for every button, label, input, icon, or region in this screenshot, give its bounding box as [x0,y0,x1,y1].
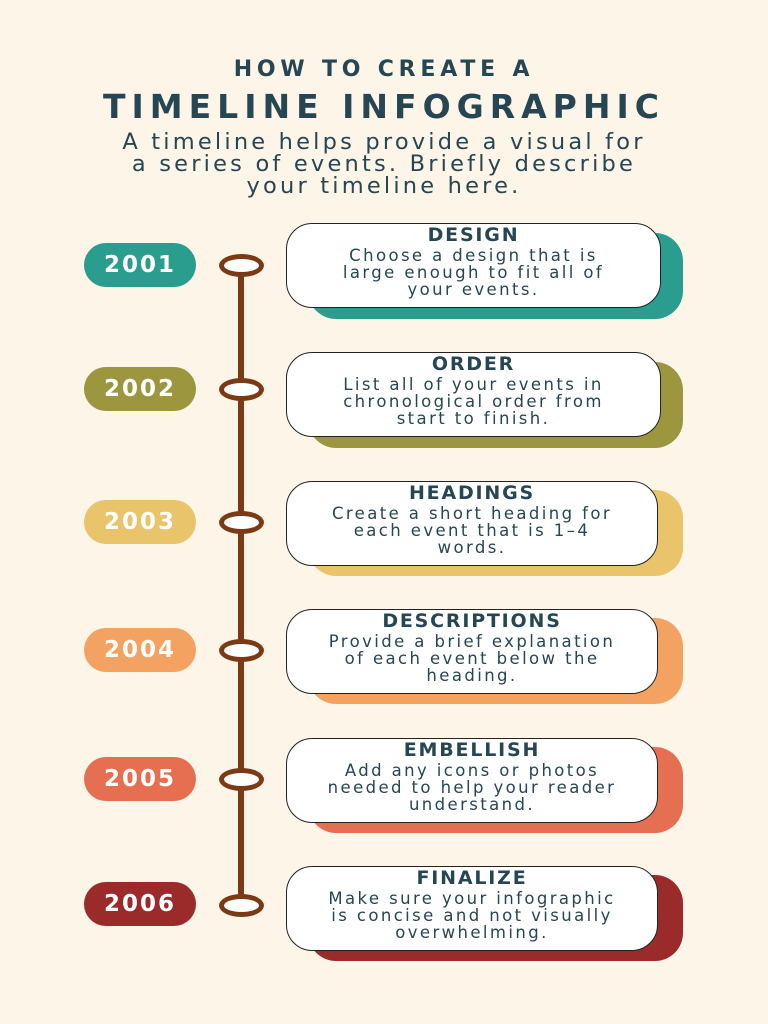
year 2004 [84,628,196,672]
subtitle: a series of events. Briefly describe [132,151,636,177]
subtitle [122,129,646,199]
subtitle: your timeline here. [246,173,522,199]
year 2001 [84,243,196,287]
card shadow 2006 [308,875,683,961]
card: order: chronological order from [343,392,604,411]
timeline line [238,265,244,905]
card: order: ORDER [432,353,515,375]
card: headings: each event that is 1–4 [354,521,590,540]
year 2002: 2002 [104,376,176,402]
card: headings [286,481,658,566]
title: small: HOW TO CREATE A [234,57,534,82]
card: embellish: EMBELLISH [404,739,540,761]
marker 2004 [219,639,264,662]
card: design: large enough to fit all of [343,263,604,282]
card: descriptions: heading. [426,666,518,685]
card: finalize [286,866,658,951]
card: finalize: overwhelming. [395,923,549,942]
card shadow 2001 [308,233,683,319]
card: order: start to finish. [397,409,550,428]
card shadow 2003 [308,490,683,576]
card: embellish: Add any icons or photos [345,761,599,780]
card: descriptions: Provide a brief explanation [329,632,615,651]
year 2006 [84,882,196,926]
year 2003: 2003 [104,509,176,535]
card: headings: words. [438,538,506,557]
title: main: TIMELINE INFOGRAPHIC [103,87,665,126]
card: embellish: needed to help your reader [328,778,616,797]
year 2002 [84,367,196,411]
card shadow 2004 [308,618,683,704]
marker 2003 [219,511,264,534]
marker 2005 [219,768,264,791]
marker 2001 [219,254,264,277]
card: design: Choose a design that is [349,246,598,265]
year 2001: 2001 [104,252,176,278]
year 2004: 2004 [104,637,176,663]
card shadow 2005 [308,747,683,833]
card: design [286,223,661,308]
year 2003 [84,500,196,544]
card: headings: Create a short heading for [332,504,612,523]
card: embellish [286,738,658,823]
year 2005 [84,757,196,801]
card: design: your events. [408,280,539,299]
card: embellish: understand. [409,795,535,814]
card: order [286,352,661,437]
subtitle: A timeline helps provide a visual for [122,129,646,155]
year 2006: 2006 [104,891,176,917]
card: finalize: is concise and not visually [331,906,613,925]
card: finalize: Make sure your infographic [328,889,616,908]
card: design: DESIGN [428,224,519,246]
card: descriptions: of each event below the [345,649,599,668]
card shadow 2002 [308,362,683,448]
card: descriptions [286,609,658,694]
marker 2002 [219,378,264,401]
year 2005: 2005 [104,766,176,792]
card: order: List all of your events in [343,375,604,394]
marker 2006 [219,894,264,917]
card: headings: HEADINGS [409,482,535,504]
card: descriptions: DESCRIPTIONS [382,610,562,632]
card: finalize: FINALIZE [416,867,528,889]
